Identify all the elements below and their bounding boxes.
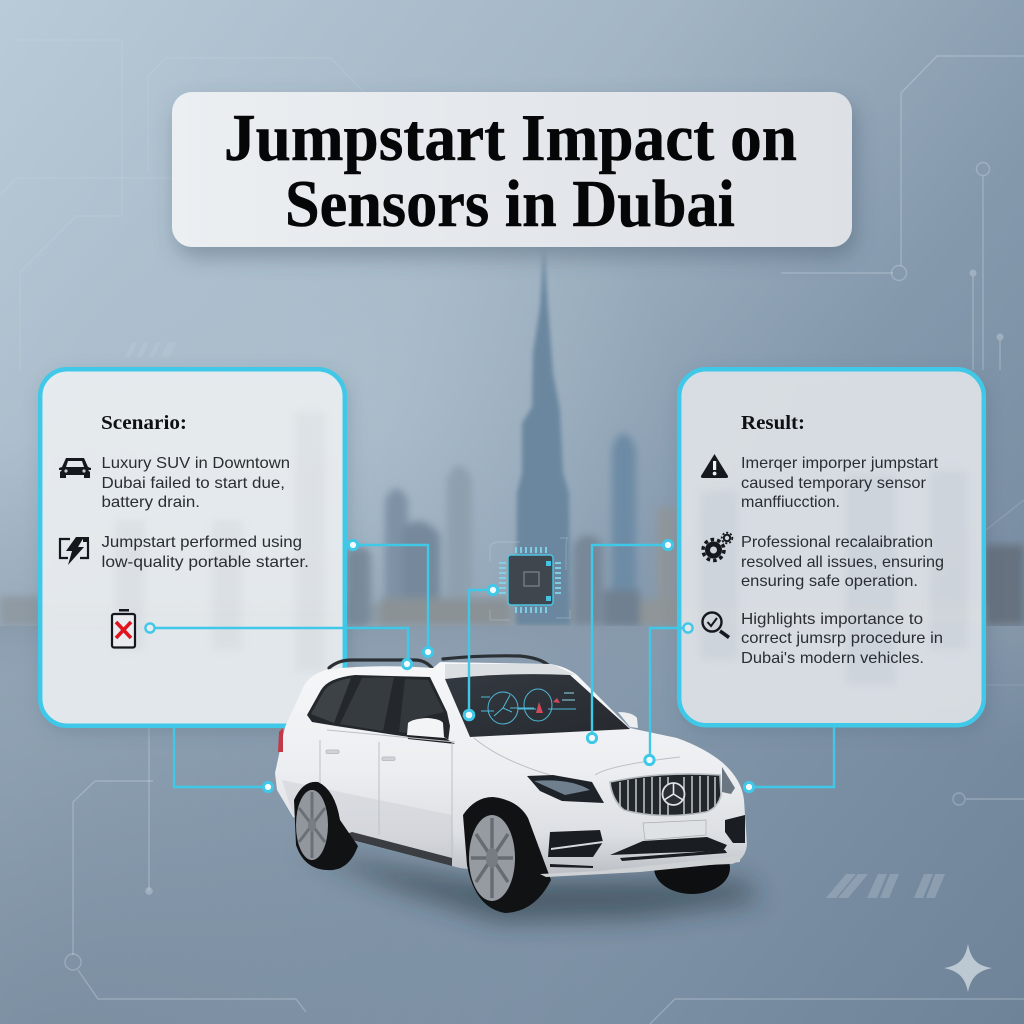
far wheel [654, 842, 730, 894]
far headlight [722, 767, 735, 794]
windshield with dashboard [445, 674, 630, 737]
far mirror [618, 712, 638, 728]
roof highlight [445, 664, 575, 679]
text: result 3 [741, 611, 943, 667]
icon: microchip [490, 538, 570, 620]
text: result 2: ensuring safe operation. [741, 573, 918, 590]
text: scenario 1: battery drain. [102, 494, 200, 511]
heading: Scenario: Scenario: [101, 412, 187, 434]
water [0, 626, 1024, 746]
side shading [282, 780, 455, 863]
text: scenario 2 [102, 534, 309, 571]
connector: scenario top to roof [348, 540, 433, 657]
decorative slashes top left [125, 342, 177, 357]
text: result 2: Professional recalaibration [741, 534, 933, 551]
text: result 1 [741, 455, 939, 511]
connectors [145, 540, 834, 792]
title text [224, 101, 797, 241]
skyline ghost behind result panel [700, 470, 968, 685]
roof rails [329, 656, 548, 668]
rear wheel [294, 782, 358, 870]
side skirt [344, 832, 452, 866]
headlight [527, 775, 604, 803]
panel: result [679, 369, 984, 725]
icon: magnifier check [702, 612, 729, 638]
text: scenario 1: Dubai failed to start due, [102, 475, 285, 492]
text: result 3: Dubai's modern vehicles. [741, 650, 924, 667]
text: scenario 2: low-quality portable starter. [102, 554, 309, 571]
icon: failed battery [112, 609, 135, 648]
door lines and handles [320, 730, 680, 863]
near mirror [407, 718, 455, 744]
icon: gears [703, 533, 732, 560]
car [275, 656, 747, 913]
title text: Sensors in Dubai [285, 167, 735, 241]
panel: title [172, 92, 852, 247]
text: scenario 1: Luxury SUV in Downtown [102, 455, 290, 472]
connector: scenario panel to rear [174, 727, 273, 792]
text: result 3: Highlights importance to [741, 611, 923, 628]
connector: battery to roof [145, 623, 412, 669]
car shadow [300, 850, 760, 922]
body [275, 662, 747, 878]
sparkle icon [944, 944, 992, 992]
title text: Jumpstart Impact on [224, 101, 797, 175]
skyline ghost behind scenario panel [115, 412, 325, 672]
side windows [307, 675, 450, 742]
connector: magnifier to hood [645, 623, 693, 765]
text: result 1: manffiucction. [741, 494, 840, 511]
icon: car [59, 458, 91, 478]
heading: Result: Result: [741, 412, 805, 434]
panel: scenario [40, 369, 345, 726]
decorative slashes bottom right [826, 874, 945, 898]
text: scenario 2: Jumpstart performed using [102, 534, 302, 551]
text: scenario 1 [102, 455, 290, 511]
text: result 2 [741, 534, 944, 590]
text: result 2: resolved all issues, ensuring [741, 554, 944, 571]
rear light [278, 728, 283, 752]
icon: warning [701, 454, 728, 478]
grille [610, 774, 721, 816]
license plate [643, 820, 706, 840]
text: result 1: Imerqer imporper jumpstart [741, 455, 939, 472]
text: result 3: correct jumsrp procedure in [741, 630, 943, 647]
text: result 1: caused temporary sensor [741, 475, 927, 492]
connector: result to hood [587, 540, 673, 743]
icon: jumpstarter bolt [60, 537, 89, 565]
connector: result panel to front [744, 727, 834, 792]
front wheel [463, 797, 551, 913]
blurred Dubai skyline [0, 248, 1024, 627]
connector: chip to dashboard [464, 585, 498, 720]
lower intakes [548, 815, 745, 868]
